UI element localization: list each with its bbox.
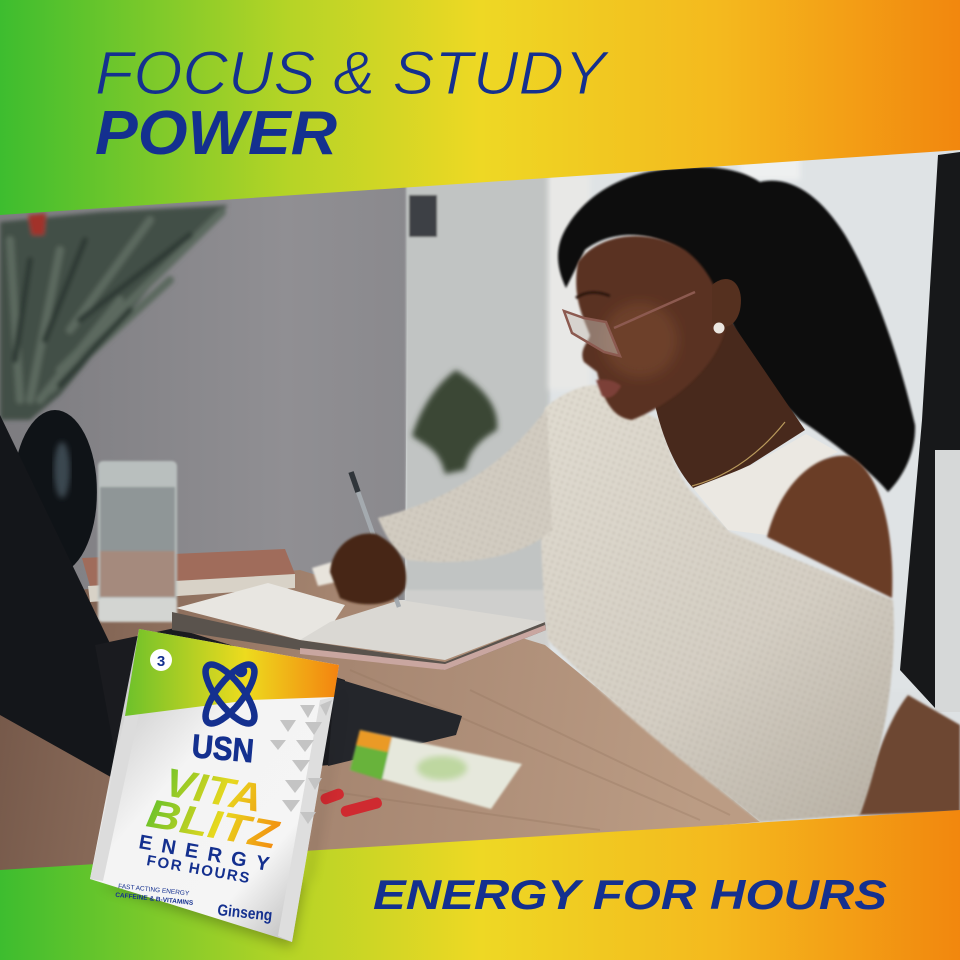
glass of water	[98, 461, 177, 622]
pouch body	[90, 629, 339, 942]
capsules	[319, 787, 383, 818]
top gradient band	[0, 0, 960, 215]
pouch side seam left	[90, 714, 139, 881]
Blitz wordmark: BLITZ	[143, 792, 283, 858]
ginseng label: Ginseng	[217, 902, 273, 925]
laptop	[0, 415, 462, 785]
title: power: POWER	[95, 99, 337, 168]
hair	[558, 167, 915, 492]
For hours label: FOR HOURS	[145, 852, 251, 887]
neck and chest	[655, 320, 805, 490]
small claim text: CAFFEINE & B-VITAMINS	[115, 892, 194, 907]
vase	[13, 410, 97, 574]
bare shoulder	[767, 456, 892, 598]
glasses	[564, 292, 695, 356]
wooden desk	[0, 570, 760, 875]
stick sachet on desk	[350, 730, 522, 809]
sweater body	[541, 385, 894, 822]
grey wall	[0, 180, 408, 600]
Energy label: ENERGY	[137, 831, 272, 876]
hand	[330, 533, 406, 604]
face	[576, 236, 725, 420]
capsule count badge: 3	[157, 653, 165, 670]
window background	[548, 150, 940, 690]
pouch coloured top	[125, 629, 339, 716]
USN atom logo	[198, 658, 262, 730]
white tank top	[693, 434, 838, 535]
small claim text: FAST ACTING ENERGY	[118, 883, 190, 898]
Vita wordmark: VITA	[161, 761, 266, 821]
ear and earring	[712, 279, 741, 334]
light wall section	[405, 170, 551, 660]
necklace	[692, 422, 785, 486]
open notebook	[172, 583, 546, 670]
desk plant	[0, 205, 228, 420]
bottom gradient band	[0, 810, 960, 960]
capsule count badge	[150, 649, 172, 671]
title: focus and study: FOCUS & STUDY	[95, 39, 610, 107]
sweater sleeve	[312, 408, 552, 586]
pen	[351, 472, 399, 607]
background plant	[412, 370, 497, 474]
tagline: energy for hours: ENERGY FOR HOURS	[373, 871, 887, 918]
books under glass	[82, 549, 295, 602]
USN wordmark: USN	[190, 727, 255, 769]
pouch shadow	[100, 680, 345, 948]
triangle pattern	[270, 700, 332, 824]
small claim text	[115, 883, 195, 907]
chair	[858, 695, 960, 815]
dark door frame	[900, 152, 960, 712]
pouch side seam right	[278, 697, 334, 942]
product pouch	[90, 629, 345, 948]
